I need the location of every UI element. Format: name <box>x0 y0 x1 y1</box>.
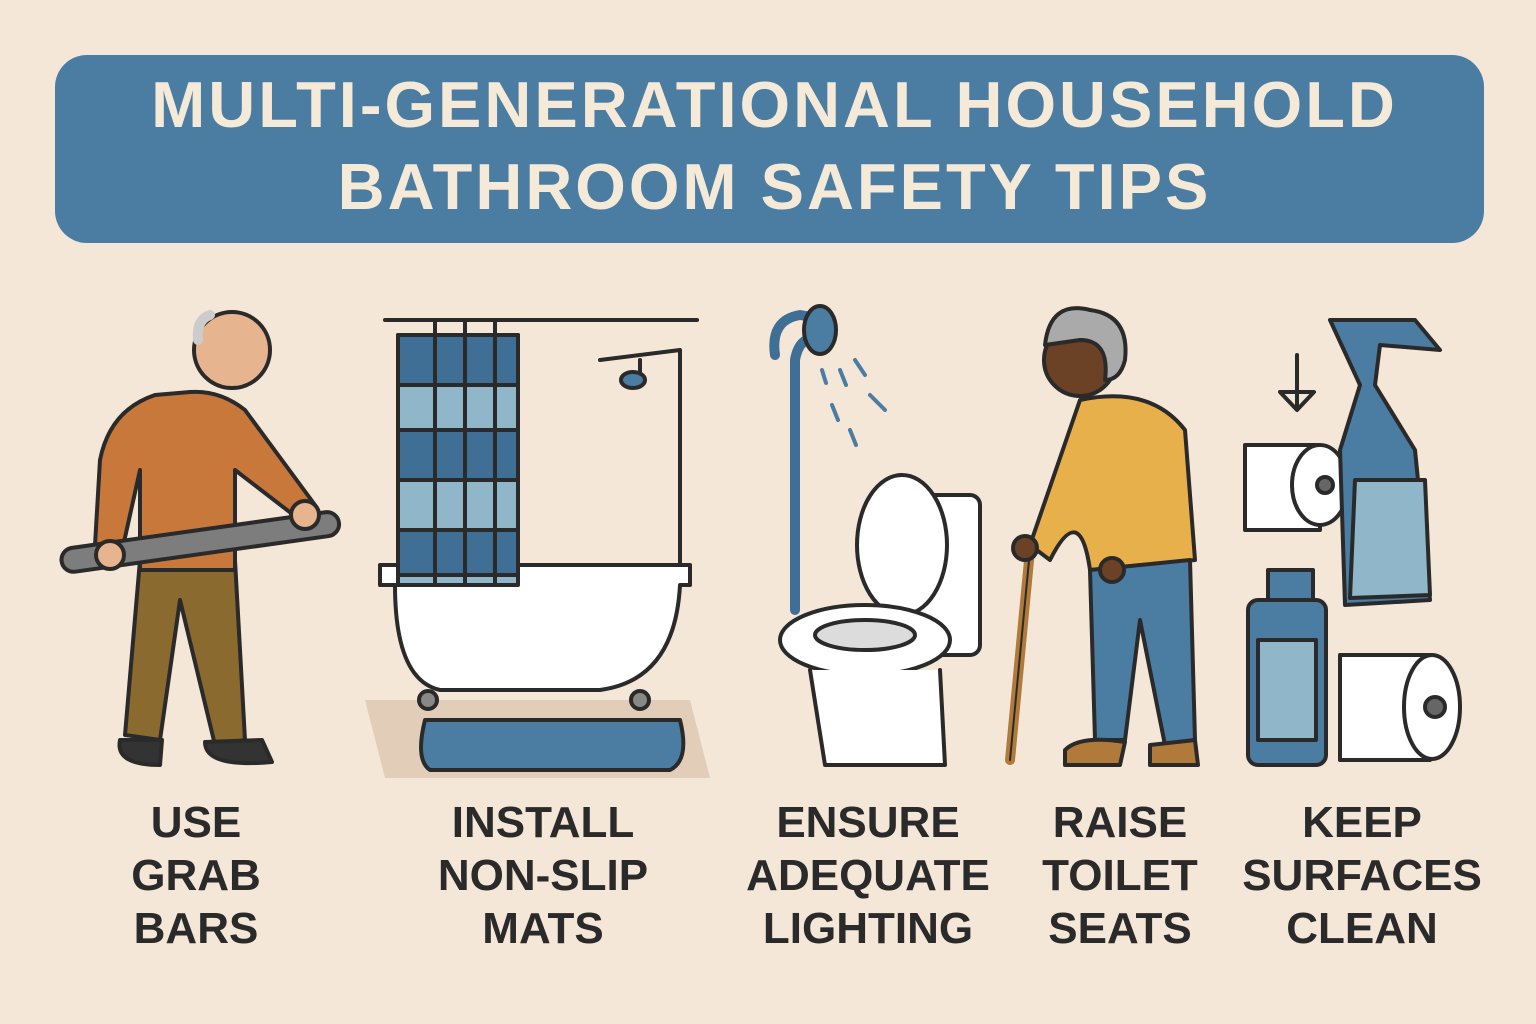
label: non-slip mats: INSTALL <box>452 798 634 847</box>
label: grab bars <box>131 798 261 953</box>
label: non-slip mats: MATS <box>482 904 604 953</box>
label: toilet seats <box>1042 798 1198 953</box>
label: grab bars: BARS <box>134 904 258 953</box>
icon: bathtub with curtain and mat <box>365 320 710 778</box>
label: lighting: LIGHTING <box>763 904 973 953</box>
title <box>151 68 1398 223</box>
label: toilet seats: TOILET <box>1042 851 1198 900</box>
title banner <box>55 55 1484 243</box>
label: grab bars: GRAB <box>131 851 261 900</box>
label: toilet seats: SEATS <box>1048 904 1192 953</box>
label: non-slip mats <box>438 798 648 953</box>
label: clean surfaces <box>1242 798 1482 953</box>
label: lighting <box>746 798 990 953</box>
label: lighting: ENSURE <box>776 798 960 847</box>
icon: woman with cane <box>1010 308 1198 765</box>
title: BATHROOM SAFETY TIPS <box>338 150 1211 223</box>
label: clean surfaces: SURFACES <box>1242 851 1482 900</box>
label: non-slip mats: NON-SLIP <box>438 851 648 900</box>
icon: cleaning supplies <box>1245 320 1460 765</box>
label: clean surfaces: KEEP <box>1302 798 1422 847</box>
label: toilet seats: RAISE <box>1053 798 1187 847</box>
icon: toilet with shower <box>774 306 980 765</box>
label: lighting: ADEQUATE <box>746 851 990 900</box>
icon: man with grab bar <box>60 312 341 765</box>
label: grab bars: USE <box>151 798 241 847</box>
title: MULTI-GENERATIONAL HOUSEHOLD <box>151 68 1398 141</box>
label: clean surfaces: CLEAN <box>1286 904 1438 953</box>
